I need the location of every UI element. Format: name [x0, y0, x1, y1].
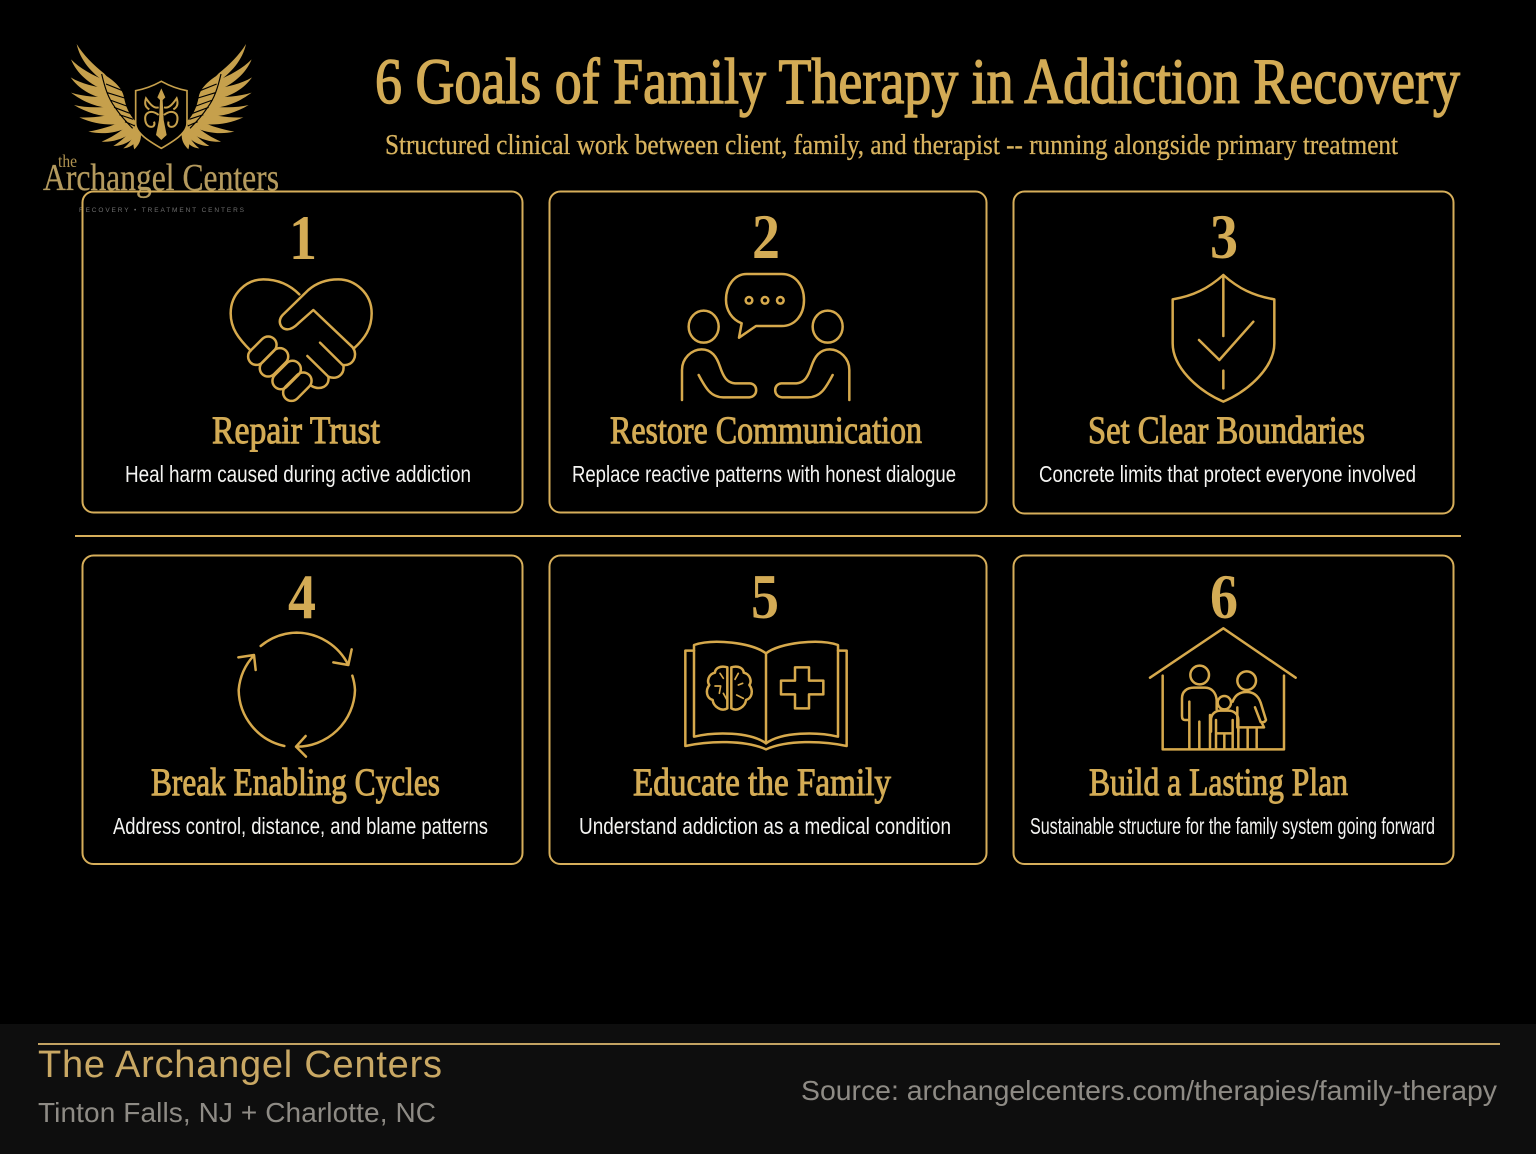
- number 2: 2: [752, 202, 780, 272]
- panel: goal 5 educate the family: [550, 556, 986, 864]
- number 5: 5: [751, 562, 779, 632]
- logo wordmark: Archangel Centers: [43, 157, 279, 199]
- footer source: Source: archangelcenters.com/therapies/family-therapy: [801, 1075, 1497, 1106]
- panel: goal 1 repair trust: [82, 192, 522, 512]
- icon: two people talking: [682, 274, 849, 400]
- panel: goal 4 break enabling cycles: [82, 556, 522, 864]
- divider: [75, 535, 1461, 537]
- number 1: 1: [289, 203, 317, 273]
- icon: family in house: [1150, 628, 1296, 749]
- heading: Build a Lasting Plan: [1089, 761, 1348, 804]
- number 3: 3: [1210, 202, 1238, 272]
- footer organisation name: The Archangel Centers: [38, 1044, 442, 1086]
- heading: Restore Communication: [610, 409, 922, 452]
- description: Concrete limits that protect everyone involved: [1039, 461, 1416, 487]
- description: Understand addiction as a medical condition: [579, 813, 951, 839]
- logo tagline: RECOVERY • TREATMENT CENTERS: [79, 207, 245, 214]
- subtitle: Structured clinical work between client, family, and therapist -- running alongside primary treatment: [385, 129, 1398, 161]
- icon: cycle arrows: [238, 633, 355, 757]
- logo: The Archangel Centers: [43, 44, 279, 214]
- icon: shield with check: [1173, 275, 1274, 402]
- heading: Set Clear Boundaries: [1088, 409, 1365, 452]
- heading: Break Enabling Cycles: [151, 761, 440, 804]
- icon: handshake heart: [231, 279, 372, 404]
- footer band: [0, 1024, 1536, 1154]
- panel: goal 2 restore communication: [550, 192, 986, 512]
- footer locations: Tinton Falls, NJ + Charlotte, NC: [38, 1097, 436, 1128]
- number 4: 4: [288, 562, 316, 632]
- panel: goal 6 build a lasting plan: [1014, 556, 1454, 864]
- description: Replace reactive patterns with honest dialogue: [572, 461, 956, 487]
- description: Address control, distance, and blame patterns: [113, 813, 488, 839]
- heading: Repair Trust: [212, 409, 380, 452]
- logo wordmark small: the: the: [58, 151, 77, 171]
- description: Heal harm caused during active addiction: [125, 461, 471, 487]
- panel: goal 3 set clear boundaries: [1014, 192, 1454, 514]
- logo emblem: winged shield: [71, 44, 252, 149]
- icon: open book with brain and cross: [685, 642, 847, 749]
- heading: Educate the Family: [633, 761, 891, 804]
- number 6: 6: [1210, 562, 1238, 632]
